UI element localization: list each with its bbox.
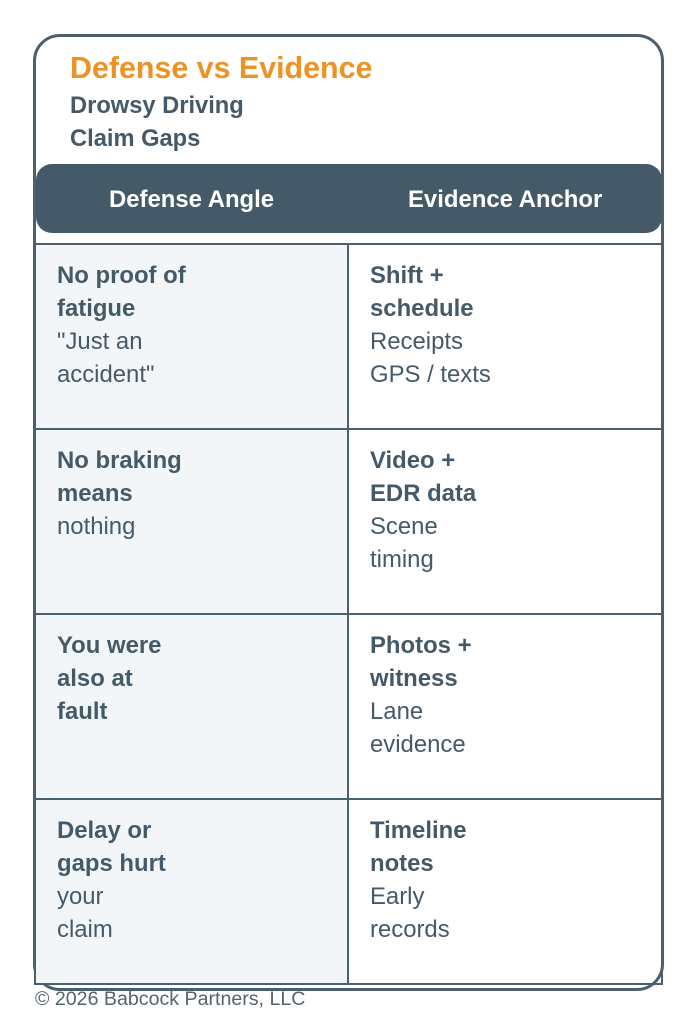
row 1 evidence: schedule xyxy=(370,295,474,322)
row 2 evidence: timing xyxy=(370,546,434,573)
row 2 defense: No braking xyxy=(57,447,182,474)
row 4 evidence xyxy=(347,798,663,985)
row 3 evidence xyxy=(347,613,663,800)
row 1 defense: No proof of xyxy=(57,262,186,289)
subtitle: Drowsy Driving xyxy=(70,93,244,119)
row 3 evidence: Photos + xyxy=(370,632,472,659)
row 2 defense: nothing xyxy=(57,513,135,540)
row 3 evidence: Lane xyxy=(370,698,423,725)
row 4 evidence: notes xyxy=(370,850,434,877)
row 4 defense: gaps hurt xyxy=(57,850,166,877)
subtitle xyxy=(70,93,244,152)
row 4 defense: Delay or xyxy=(57,817,151,844)
footer copyright: © 2026 Babcock Partners, LLC xyxy=(35,988,305,1010)
row 2 evidence: EDR data xyxy=(370,480,476,507)
row 3 defense: fault xyxy=(57,698,107,725)
row 4 defense xyxy=(34,798,349,985)
row 2 evidence: Video + xyxy=(370,447,455,474)
header: defense angle: Defense Angle xyxy=(109,186,274,213)
row 1 defense: "Just an xyxy=(57,328,143,355)
comparison table xyxy=(34,243,663,985)
row 1 defense: fatigue xyxy=(57,295,135,322)
row 1 defense: accident" xyxy=(57,361,154,388)
row 4 evidence: records xyxy=(370,916,450,943)
row 1 evidence xyxy=(347,243,663,430)
table header bar xyxy=(36,164,662,233)
row 1 evidence: Receipts xyxy=(370,328,463,355)
subtitle: Claim Gaps xyxy=(70,126,200,152)
header: evidence anchor: Evidence Anchor xyxy=(408,186,602,213)
row 3 evidence: witness xyxy=(370,665,458,692)
row 2 defense: means xyxy=(57,480,133,507)
row 4 evidence: Timeline xyxy=(370,817,466,844)
row 4 defense: your xyxy=(57,883,103,910)
row 3 evidence: evidence xyxy=(370,731,466,758)
row 4 defense: claim xyxy=(57,916,113,943)
row 3 defense: also at xyxy=(57,665,133,692)
row 3 defense: You were xyxy=(57,632,161,659)
row 4 evidence: Early xyxy=(370,883,424,910)
row 1 evidence: GPS / texts xyxy=(370,361,491,388)
row 2 defense xyxy=(34,428,349,615)
row 2 evidence xyxy=(347,428,663,615)
row 1 evidence: Shift + xyxy=(370,262,444,289)
title: Defense vs Evidence xyxy=(70,51,372,85)
row 1 defense xyxy=(34,243,349,430)
row 2 evidence: Scene xyxy=(370,513,438,540)
row 3 defense xyxy=(34,613,349,800)
